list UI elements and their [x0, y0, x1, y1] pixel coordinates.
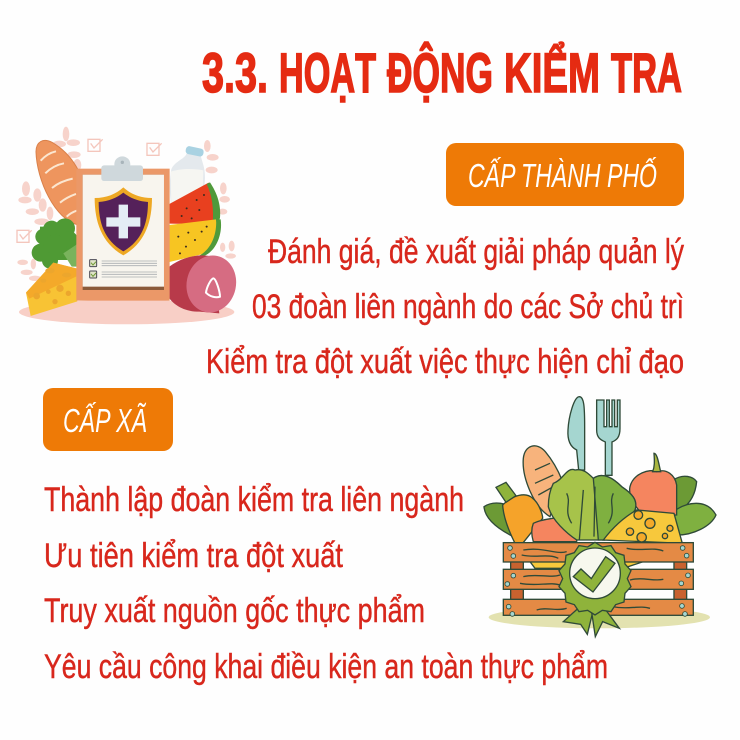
- fork: [597, 400, 620, 475]
- ham: [169, 251, 241, 317]
- yellow melon slice: [169, 219, 221, 262]
- cheese: [26, 263, 77, 316]
- badge: commune level: [43, 388, 173, 451]
- milk bottle: [170, 146, 205, 206]
- watermelon slice: [169, 182, 220, 225]
- commune level list: Ưu tiên kiểm tra đột xuất: [44, 537, 343, 575]
- ribbon and check seal: [559, 542, 631, 637]
- commune level list: [44, 481, 608, 686]
- lettuce: [548, 469, 636, 540]
- checklist: [90, 260, 157, 278]
- badge: city level: CẤP THÀNH PHỐ: [468, 156, 657, 194]
- badge: city level: [446, 143, 684, 206]
- illustration: food crate with check badge: [484, 397, 716, 637]
- title: [202, 41, 682, 104]
- leaves: [484, 503, 517, 537]
- shield: [95, 187, 152, 255]
- commune level list: Thành lập đoàn kiểm tra liên ngành: [44, 481, 464, 519]
- title: KIỂM: [504, 41, 600, 104]
- title: 3.3.: [202, 41, 268, 104]
- crate: [503, 543, 693, 616]
- clipboard: [76, 156, 170, 301]
- pepper: [630, 471, 677, 515]
- illustration: food safety clipboard: [17, 127, 241, 324]
- squash: [503, 495, 543, 543]
- commune level list: Truy xuất nguồn gốc thực phẩm: [44, 592, 425, 630]
- baguette: [36, 140, 87, 225]
- title: ĐỘNG: [387, 41, 493, 104]
- tomato: [532, 512, 577, 542]
- badge: commune level: CẤP XÃ: [63, 402, 147, 439]
- title: TRA: [611, 41, 682, 104]
- bread: [523, 446, 562, 517]
- broccoli: [32, 218, 78, 269]
- knife: [568, 397, 585, 470]
- city level list: [206, 233, 684, 381]
- cheese: [603, 510, 682, 543]
- title: HOẠT: [279, 41, 376, 104]
